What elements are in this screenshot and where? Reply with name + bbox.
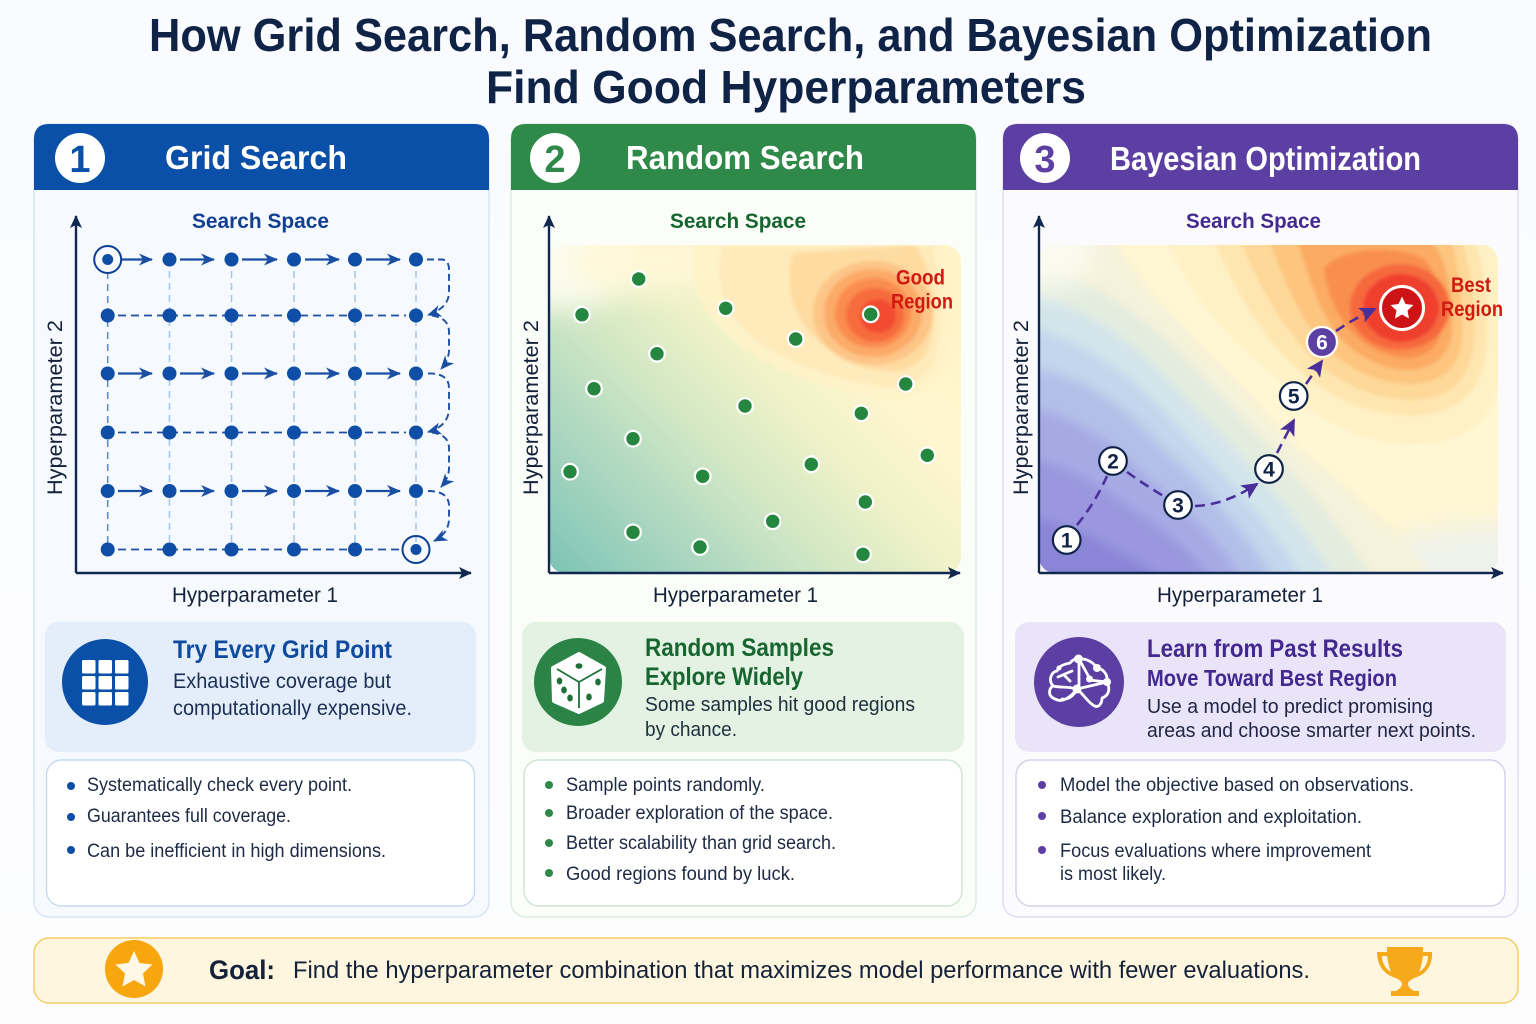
axis label x: Hyperparameter 1 bbox=[172, 584, 338, 607]
numbered evaluation points: 4 bbox=[1263, 458, 1275, 482]
numbered evaluation points: 5 bbox=[1288, 386, 1300, 408]
solid row arrows bbox=[118, 260, 400, 491]
goal text: Find the hyperparameter combination that maximizes model performance with fewer evaluations. bbox=[293, 957, 1310, 984]
panel: grid search bbox=[34, 124, 489, 917]
good region label: Good bbox=[896, 266, 945, 290]
key points list: Broader exploration of the space. bbox=[566, 803, 833, 824]
axis label y: Hyperparameter 2 bbox=[1010, 320, 1033, 495]
numbered evaluation points: 2 bbox=[1107, 450, 1119, 474]
chart heading: Search Space bbox=[192, 210, 329, 233]
best point star bbox=[1380, 286, 1424, 330]
key points list: Sample points randomly. bbox=[566, 775, 765, 796]
icon: star badge bbox=[105, 940, 163, 998]
chart heading: Search Space bbox=[1186, 210, 1321, 233]
heatmap: good region bbox=[550, 245, 961, 572]
best region label: Best bbox=[1451, 274, 1491, 297]
icon: grid bbox=[62, 639, 148, 725]
panel header: Random Search bbox=[626, 139, 864, 176]
panel header bbox=[34, 124, 489, 190]
key points list: Good regions found by luck. bbox=[566, 864, 795, 885]
best region label bbox=[1441, 274, 1503, 321]
panel body bbox=[511, 124, 976, 917]
numbered evaluation points: 6 bbox=[1316, 332, 1328, 354]
info card bbox=[45, 622, 476, 752]
info card: Learn from Past Results bbox=[1147, 635, 1403, 663]
info card bbox=[522, 622, 964, 752]
panel header: 3 bbox=[1034, 139, 1056, 181]
goal banner bbox=[34, 938, 1518, 1003]
panel body bbox=[1003, 124, 1518, 917]
dashed row connectors bbox=[118, 316, 406, 550]
serpentine turn arrows bbox=[427, 260, 449, 541]
key points list: Guarantees full coverage. bbox=[87, 806, 291, 827]
key points list: Better scalability than grid search. bbox=[566, 833, 836, 854]
key points list: Model the objective based on observations. bbox=[1060, 775, 1414, 796]
info card: Try Every Grid Point bbox=[173, 636, 393, 664]
panel header: 1 bbox=[69, 139, 91, 181]
panel: random search bbox=[490, 124, 976, 917]
axes bbox=[76, 216, 471, 573]
key points list: Focus evaluations where improvement bbox=[1060, 841, 1372, 862]
info card: Use a model to predict promising bbox=[1147, 696, 1433, 718]
panel: bayesian optimization bbox=[985, 124, 1536, 917]
info card bbox=[1015, 622, 1506, 752]
key points list: Systematically check every point. bbox=[87, 775, 352, 796]
heatmap: best region bbox=[1040, 245, 1498, 572]
numbered evaluation points: 3 bbox=[1172, 494, 1184, 518]
good region label bbox=[891, 266, 953, 314]
icon: dice bbox=[534, 638, 622, 726]
panel header bbox=[1003, 124, 1518, 190]
axes bbox=[1039, 216, 1503, 573]
info card: by chance. bbox=[645, 719, 737, 741]
numbered evaluation points: 1 bbox=[1061, 530, 1073, 552]
title: Find Good Hyperparameters bbox=[486, 61, 1086, 113]
info card: computationally expensive. bbox=[173, 697, 412, 720]
grid search chart bbox=[76, 216, 471, 573]
random sample points bbox=[562, 271, 935, 562]
info card: areas and choose smarter next points. bbox=[1147, 720, 1476, 742]
panel body bbox=[34, 124, 489, 917]
panel header: Bayesian Optimization bbox=[1110, 140, 1421, 177]
best region label: Region bbox=[1441, 298, 1503, 321]
icon: brain bbox=[1034, 637, 1124, 727]
axis label y: Hyperparameter 2 bbox=[520, 320, 543, 495]
panel header bbox=[511, 124, 976, 190]
info card: Exhaustive coverage but bbox=[173, 670, 391, 693]
key points list bbox=[524, 760, 962, 906]
info card: Move Toward Best Region bbox=[1147, 665, 1397, 691]
panel header: 2 bbox=[544, 139, 566, 181]
good region label: Region bbox=[891, 290, 953, 314]
info card: Explore Widely bbox=[645, 663, 803, 691]
chart heading: Search Space bbox=[670, 210, 806, 233]
axes bbox=[549, 216, 960, 573]
panel header: Grid Search bbox=[165, 139, 347, 176]
info card: Random Samples bbox=[645, 634, 834, 662]
key points list: is most likely. bbox=[1060, 864, 1166, 885]
info card: Some samples hit good regions bbox=[645, 694, 915, 716]
start and end rings bbox=[94, 246, 429, 563]
key points list bbox=[46, 760, 474, 906]
optimization path arrows bbox=[1077, 309, 1375, 525]
axis label x: Hyperparameter 1 bbox=[1157, 584, 1323, 607]
key points list bbox=[1016, 760, 1505, 906]
axis label y: Hyperparameter 2 bbox=[44, 320, 67, 495]
key points list: Balance exploration and exploitation. bbox=[1060, 807, 1362, 828]
axis label x: Hyperparameter 1 bbox=[653, 584, 818, 607]
goal text: Goal: bbox=[209, 955, 275, 985]
grid points bbox=[101, 252, 423, 556]
title bbox=[149, 9, 1432, 113]
icon: trophy bbox=[1377, 947, 1432, 996]
title: How Grid Search, Random Search, and Bayesian Optimization bbox=[149, 9, 1432, 61]
key points list: Can be inefficient in high dimensions. bbox=[87, 841, 386, 862]
numbered evaluation points bbox=[1053, 327, 1337, 554]
